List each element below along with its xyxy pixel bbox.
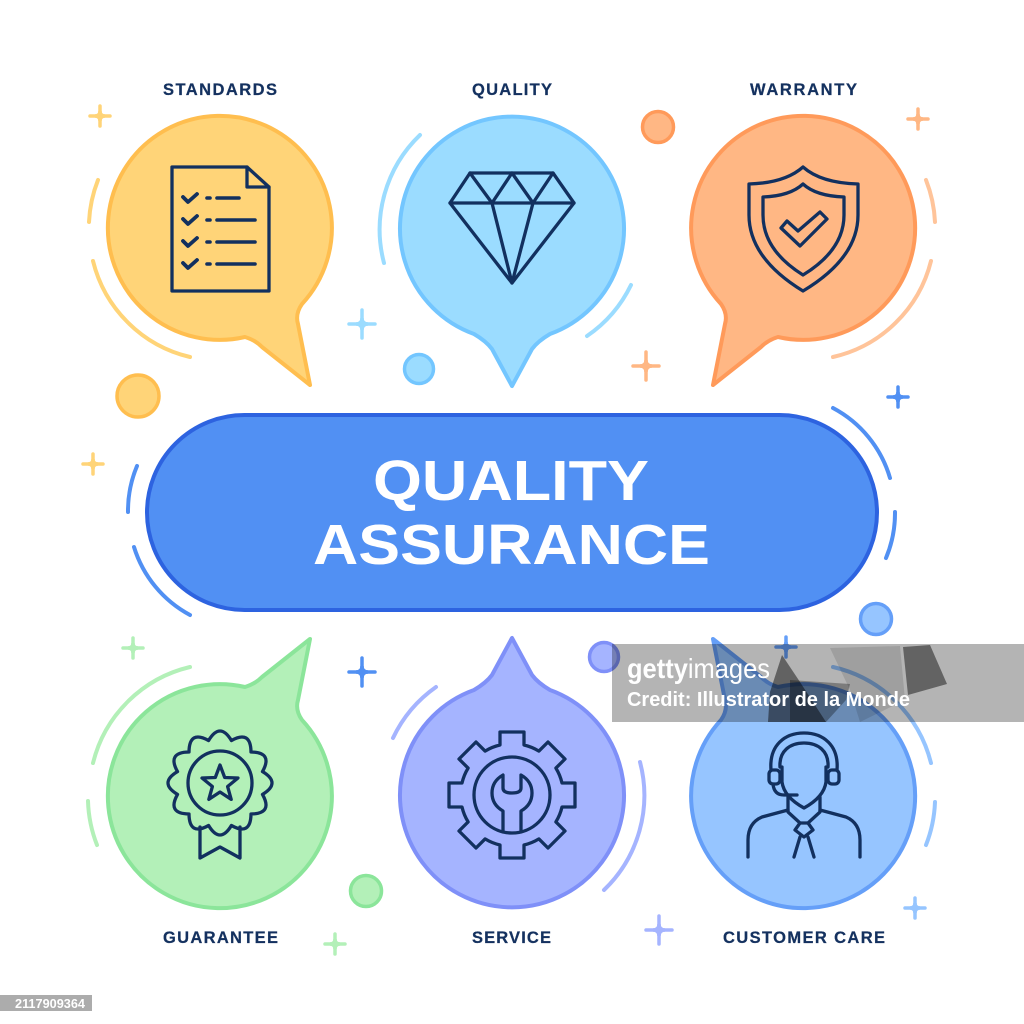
icon: checklist document <box>172 167 269 291</box>
pill background <box>147 415 877 610</box>
label: warranty: WARRANTY <box>750 81 857 99</box>
arcs: quality <box>380 135 631 336</box>
arcs: warranty <box>833 180 935 357</box>
label: quality: QUALITY <box>472 81 552 99</box>
icon: award rosette <box>168 731 272 858</box>
watermark band <box>612 644 1024 722</box>
icon: diamond <box>450 173 574 283</box>
subtitle text: ASSURANCE <box>313 513 710 577</box>
panel: service <box>393 638 644 947</box>
panel: customer care <box>691 639 935 947</box>
label: guarantee: GUARANTEE <box>163 929 278 947</box>
image id tag: 2117909364 <box>15 996 86 1011</box>
pill arcs <box>128 408 895 615</box>
panel: quality <box>380 81 631 386</box>
arcs: standards <box>89 180 190 357</box>
speech bubble: quality <box>400 117 624 386</box>
decorative dots <box>117 112 892 906</box>
label: customer care: CUSTOMER CARE <box>723 929 885 947</box>
icon: gear with wrench <box>449 732 575 858</box>
label: standards: STANDARDS <box>163 81 277 99</box>
watermark credit: Credit: Illustrator de la Monde <box>627 689 910 711</box>
speech bubble: standards <box>108 116 332 385</box>
icon: customer agent with headset <box>748 733 860 857</box>
panel: central title pill <box>128 408 895 615</box>
speech bubble: guarantee <box>108 639 332 908</box>
watermark logo: gettyimages <box>627 653 770 684</box>
arcs: guarantee <box>88 667 190 845</box>
decorative sparkles <box>83 106 928 954</box>
speech bubble: service <box>400 638 624 907</box>
icon: shield with check <box>749 167 858 291</box>
panel: guarantee <box>88 639 332 947</box>
title text: QUALITY <box>373 449 649 513</box>
label: service: SERVICE <box>472 929 551 947</box>
panel: warranty <box>691 81 935 385</box>
speech bubble: customer care <box>691 639 915 908</box>
speech bubble: warranty <box>691 116 915 385</box>
arcs: service <box>393 687 644 890</box>
panel: standards <box>89 81 332 385</box>
arcs: customer care <box>833 667 935 845</box>
